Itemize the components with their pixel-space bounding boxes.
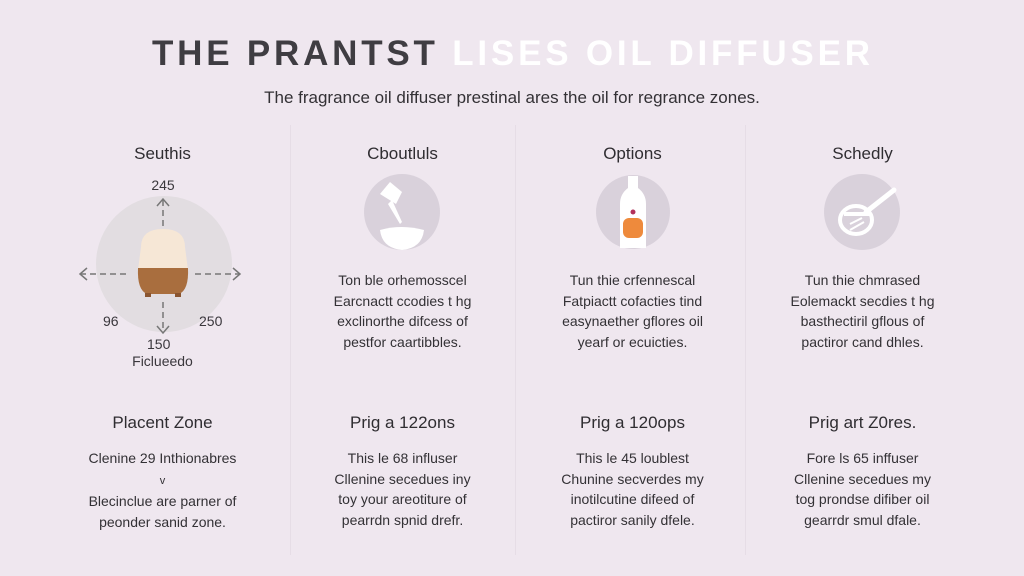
text: schedly body: Eolemackt secdies t hg: [791, 292, 934, 308]
icon: bottle: [596, 175, 670, 249]
label: 250: 250: [199, 313, 222, 329]
text: prig 3: Fore ls 65 inffuser: [807, 450, 918, 466]
text: schedly body: Tun thie chmrased: [805, 272, 920, 288]
text: options body: [562, 272, 703, 350]
text: prig 1: pearrdn spnid drefr.: [342, 512, 463, 528]
text: schedly body: basthectiril gflous of: [801, 313, 924, 329]
text: placent: Clenine 29 Inthionabres: [89, 450, 236, 466]
panel: options: [561, 144, 704, 528]
panel: seuthis: [79, 144, 241, 530]
text: placent: v: [160, 474, 165, 486]
label: 96: 96: [103, 313, 119, 329]
text: prig 2: This le 45 loublest: [576, 450, 689, 466]
diagram: diffuser zone: 245: [151, 177, 175, 193]
text: prig 2: inotilcutine difeed of: [571, 491, 694, 507]
subtitle: The fragrance oil diffuser prestinal ares the oil for regrance zones.: [264, 88, 760, 107]
text: options body: easynaether gflores oil: [562, 313, 703, 329]
text: prig 1: toy your areotiture of: [338, 491, 467, 507]
text: cboutluls body: [334, 272, 471, 350]
text: prig 3: tog prondse difiber oil: [796, 491, 929, 507]
text: prig 3: Cllenine secedues my: [794, 470, 931, 486]
text: prig 3: [794, 450, 931, 528]
text: placent: peonder sanid zone.: [99, 514, 226, 530]
text: options body: Tun thie crfennescal: [570, 272, 695, 288]
heading: cboutluls: Cboutluls: [367, 144, 438, 163]
text: cboutluls body: Earcnactt ccodies t hg: [334, 292, 471, 308]
heading: schedly: Schedly: [832, 144, 893, 163]
diagram: diffuser zone: [79, 177, 241, 334]
text: options body: yearf or ecuicties.: [578, 334, 687, 350]
icon: pour bowl: [364, 174, 440, 250]
panel: cboutluls: [334, 144, 471, 528]
text: prig 3: gearrdr smul dfale.: [804, 512, 921, 528]
panel: schedly: [791, 144, 934, 528]
label: 150: 150: [147, 336, 170, 352]
text: prig 1: [334, 450, 471, 528]
heading: options: Options: [603, 144, 662, 163]
text: placent: [89, 450, 236, 530]
text: prig 1: Cllenine secedues iny: [334, 470, 471, 486]
heading: prig 3: Prig art Z0res.: [809, 413, 916, 432]
text: cboutluls body: exclinorthe difcess of: [337, 313, 468, 329]
text: prig 2: Chunine secverdes my: [561, 470, 704, 486]
text: prig 2: pactiror sanily dfele.: [570, 512, 695, 528]
text: schedly body: pactiror cand dhles.: [801, 334, 924, 350]
text: prig 1: This le 68 influser: [348, 450, 457, 466]
text: schedly body: [791, 272, 934, 350]
text: prig 2: [561, 450, 704, 528]
text: options body: Fatpiactt cofacties tind: [563, 292, 702, 308]
heading: seuthis: Seuthis: [134, 144, 191, 163]
heading: prig 2: Prig a 120ops: [580, 413, 685, 432]
text: cboutluls body: pestfor caartibbles.: [343, 334, 462, 350]
icon: whisk: [824, 174, 900, 250]
heading: placent zone: Placent Zone: [112, 413, 213, 432]
heading: prig 1: Prig a 122ons: [350, 413, 455, 432]
text: cboutluls body: Ton ble orhemosscel: [338, 272, 467, 288]
title: THE PRANTST LISES OIL DIFFUSER: [152, 34, 870, 73]
text: placent: Blecinclue are parner of: [89, 493, 236, 509]
label: ficlueedo: Ficlueedo: [132, 353, 193, 369]
